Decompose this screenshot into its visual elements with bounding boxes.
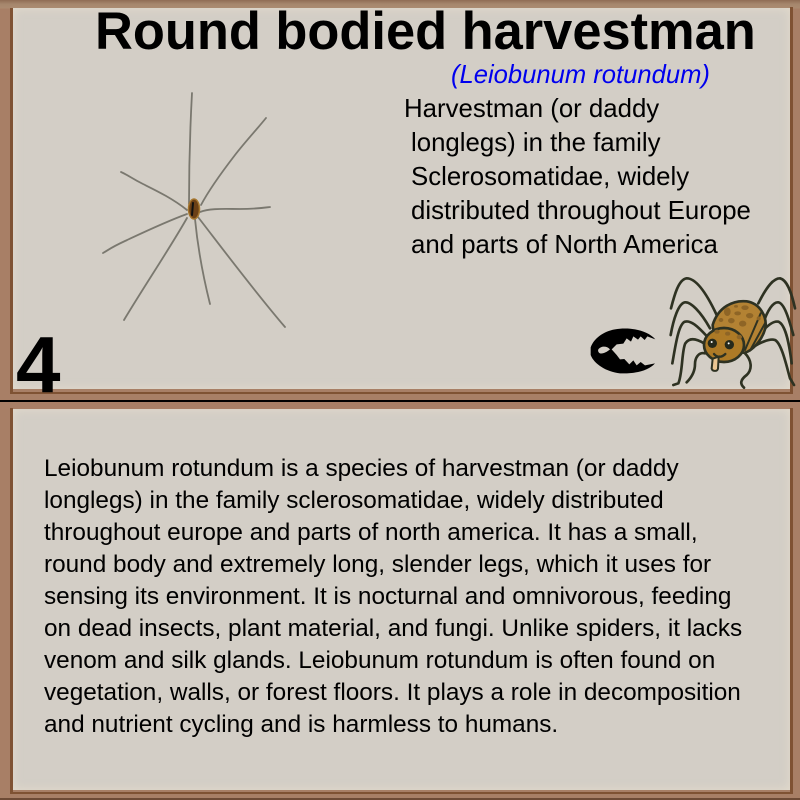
summary text: and parts of North America (411, 231, 718, 259)
body text: Leiobunum rotundum is a species of harvestman (or daddy (44, 455, 679, 482)
scientific name: (Leiobunum rotundum) (451, 61, 710, 89)
icon: cartoon harvestman (669, 277, 796, 390)
card number: 4 (16, 320, 60, 409)
body text: throughout europe and parts of north america. It has a small, (44, 519, 698, 546)
body text: on dead insects, plant material, and fungi. Unlike spiders, it lacks (44, 615, 742, 642)
body text: sensing its environment. It is nocturnal and omnivorous, feeding (44, 583, 731, 610)
body text: vegetation, walls, or forest floors. It plays a role in decomposition (44, 679, 741, 706)
body text: longlegs) in the family sclerosomatidae, widely distributed (44, 487, 664, 514)
summary text: distributed throughout Europe (411, 197, 751, 225)
photo: harvestman (102, 92, 286, 328)
summary text (404, 95, 751, 259)
body text: round body and extremely long, slender legs, which it uses for (44, 551, 711, 578)
summary text: Harvestman (or daddy (404, 95, 659, 123)
summary text: longlegs) in the family (411, 129, 660, 157)
icon: chelicerae claw (590, 328, 656, 374)
title: Round bodied harvestman (95, 3, 756, 61)
panel: top card (0, 0, 800, 400)
body text: and nutrient cycling and is harmless to humans. (44, 711, 558, 738)
panel: bottom card (0, 402, 800, 800)
divider line (0, 400, 800, 402)
summary text: Sclerosomatidae, widely (411, 163, 689, 191)
body text (44, 455, 742, 738)
body text: venom and silk glands. Leiobunum rotundum is often found on (44, 647, 715, 674)
